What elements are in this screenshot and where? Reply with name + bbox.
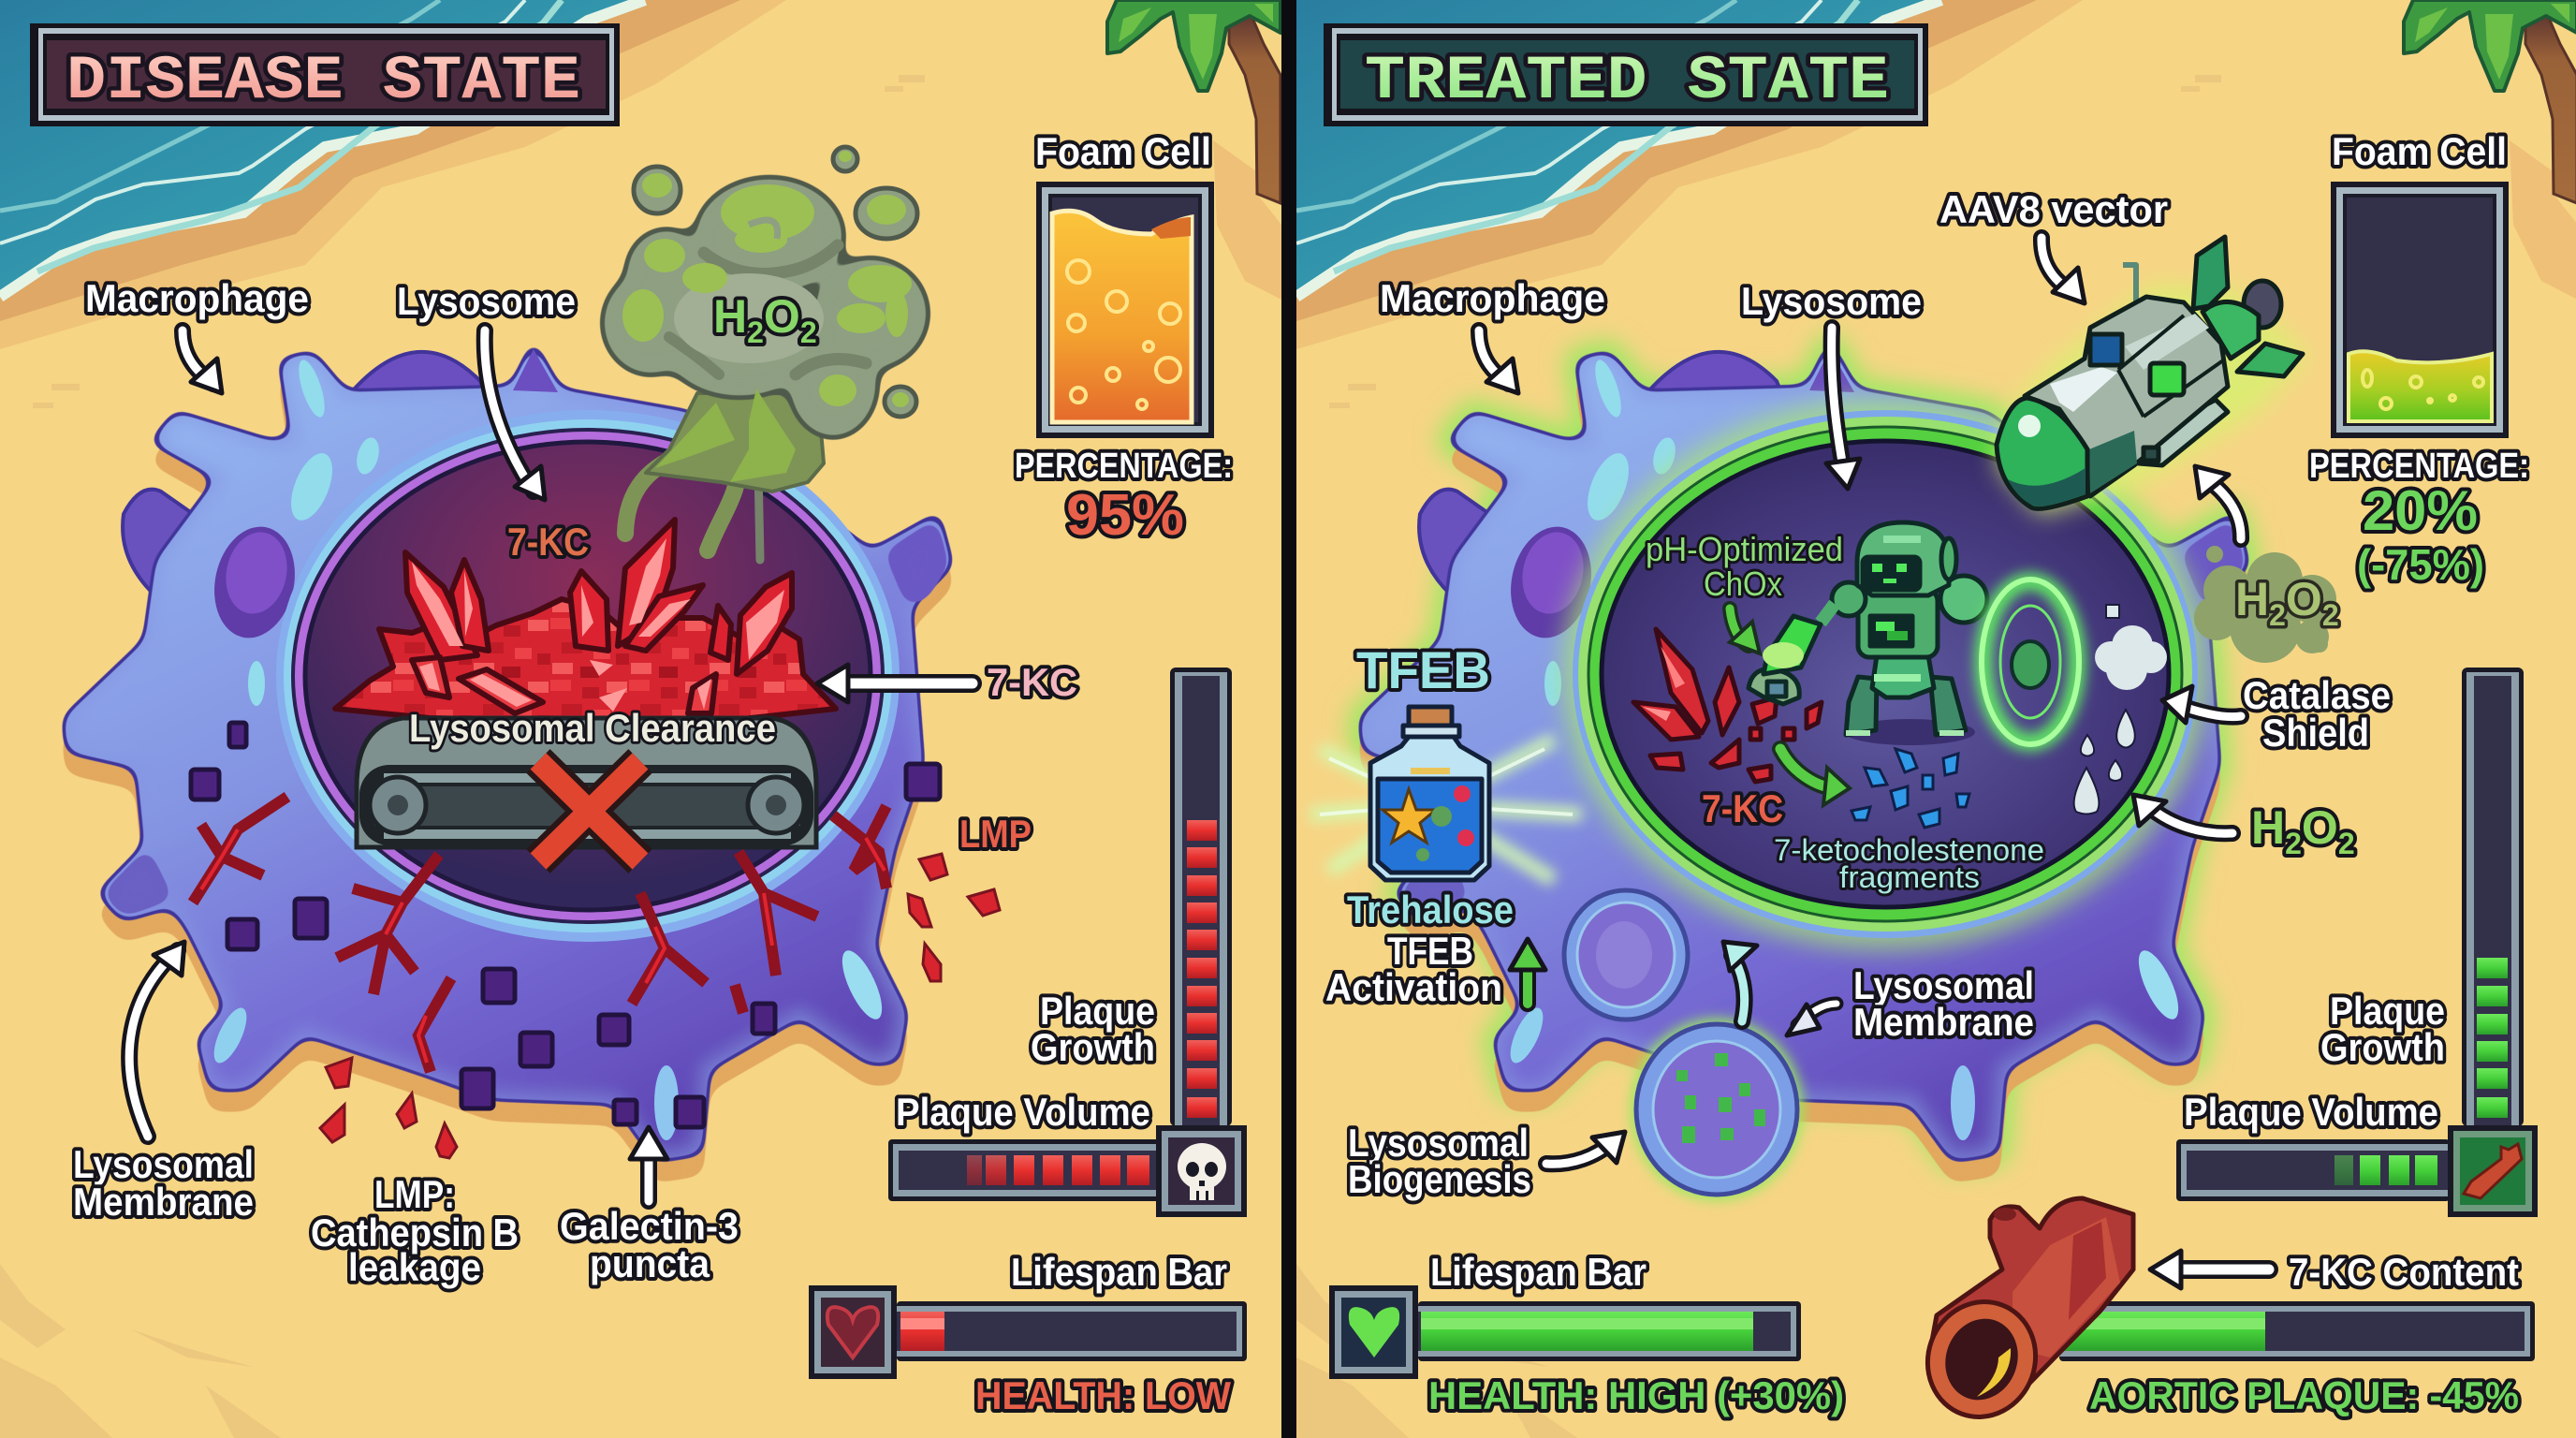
labels: treated: Growth [2320,1025,2445,1069]
icon: white H2O2 cloud and droplets [2074,605,2167,814]
label: H2O2 in cloud: H [713,290,747,343]
labels: disease: Growth [1031,1025,1155,1069]
labels: treated: 7-ketocholestenone [1774,833,2044,867]
foam percentage: 20%, -75%: (-75%) [2357,540,2484,589]
labels: disease: Plaque [1040,989,1155,1033]
foam percentage: 20%, -75%: 20% [2363,479,2478,542]
smoke cloud: H2O2 [600,147,930,560]
beach background [0,0,1281,1438]
label: H2O2 in cloud: 2 [800,315,817,349]
labels: treated: Lifespan Bar [1430,1250,1647,1294]
labels: treated: Plaque [2330,989,2445,1033]
lifespan bar, high [1418,1301,1801,1361]
labels: treated: AORTIC PLAQUE: -45% [2089,1373,2519,1417]
plaque volume bar, green [2176,1139,2450,1201]
cathepsin B droplets [320,854,1000,1158]
labels: treated: Lysosome [1741,279,1922,323]
labels: treated: 7-KC Content [2289,1250,2519,1294]
labels: treated: TFEB [1356,640,1490,699]
labels: treated: Plaque Volume [2184,1090,2438,1134]
label: H2O2 small cloud: H [2235,573,2269,625]
icon: artery box [2448,1125,2538,1217]
membrane cracks [193,797,886,1072]
foam percentage: 95%: PERCENTAGE: [1015,447,1233,486]
panel: treated state [1296,0,2576,1438]
heading: disease state: DISEASE STATE [66,46,580,116]
label: H2O2 small cloud: 2 [2269,598,2286,632]
foam percentage: 20%, -75%: PERCENTAGE: [2309,447,2529,486]
label: H2O2 small cloud: O [2286,573,2322,625]
labels: disease: leakage [348,1245,481,1289]
icon: catalase shield [1982,580,2079,744]
icon: heart, low [809,1285,897,1379]
panel: disease state [0,0,1281,1438]
labels: treated: Lysosomal [1348,1121,1529,1165]
conveyor: lysosomal clearance blocked [357,718,816,861]
icon: AAV8 vector submarine [1997,237,2307,515]
arrow: ChOx to enzyme [1730,609,1760,653]
labels: treated: AAV8 vector [1939,187,2168,231]
labels: disease [73,276,1231,1417]
vesicle: lysosomal biogenesis [1631,1019,1803,1200]
label: H2O2 small cloud: 2 [2322,598,2339,632]
labels: treated: Lysosomal [1853,963,2034,1007]
labels: disease: Lysosome [397,279,576,323]
labels: treated: 7-KC [1702,786,1783,830]
labels: treated [1325,187,2519,1417]
labels: treated: Catalase [2243,673,2391,717]
labels: treated: HEALTH: HIGH (+30%) [1428,1373,1844,1417]
labels: treated: O [2302,801,2338,854]
foam percentage: 95%: 95% [1066,483,1184,548]
plaque growth bar, green [2462,668,2524,1126]
labels: treated: Activation [1325,965,1502,1009]
galectin-3 puncta [191,723,940,1127]
labels: disease: Membrane [73,1180,254,1224]
labels: disease: puncta [590,1241,710,1285]
red X [538,761,640,861]
icon: blue fragments [1852,749,1969,828]
labels: treated: pH-Optimized [1646,530,1843,568]
icon: heart, high [1329,1285,1418,1379]
lysosome, green ring [1562,398,2208,950]
labels: disease: 7-KC [987,660,1077,704]
icon: aorta [1911,1198,2133,1432]
labels: treated: ChOx [1704,565,1782,603]
aortic plaque bar [2059,1301,2535,1361]
labels: treated: H [2251,801,2285,854]
icon: red crystals being cleared [1633,629,1822,782]
labels: treated: Membrane [1853,1000,2034,1044]
plaque growth bar, red [1170,668,1232,1126]
divider [1281,0,1296,1438]
labels: disease: Cathepsin B [311,1211,519,1255]
labels: disease: LMP [959,812,1032,856]
labels: treated: Macrophage [1380,276,1605,320]
labels: treated: TFEB [1387,929,1473,973]
labels: disease: Lysosomal Clearance [409,706,776,750]
heading: treated state [1324,23,1928,126]
foam percentage: 95% [1015,447,1233,548]
beach background, treated [1296,0,2576,1438]
foam cell gauge: Foam Cell [1035,129,1211,173]
lysosome [276,410,900,942]
labels: disease: Lysosomal [73,1142,254,1186]
heading: disease state [30,23,620,126]
arrows: treated [1479,238,2269,1288]
icon: TFEB bottle [1310,707,1582,880]
label: H2O2 in cloud: 2 [747,315,764,349]
foam percentage: 20%, -75% [2309,447,2529,589]
arrow: crystals to fragments [1780,749,1850,805]
vesicle: upper [1564,890,1688,1020]
foam cell gauge, treated [2331,129,2509,438]
macrophage cell, treated [1364,349,2245,1178]
labels: treated: 2 [2285,827,2302,860]
labels: disease: LMP: [374,1172,455,1216]
foam cell gauge [1035,129,1214,438]
labels: disease: Lifespan Bar [1011,1250,1227,1294]
labels: disease: Galectin-3 [560,1204,739,1248]
lifespan bar, low [897,1301,1247,1361]
label: H2O2 in cloud: O [764,290,800,343]
plaque volume bar, red [888,1139,1160,1201]
labels: disease: Macrophage [85,276,309,320]
labels: disease: Plaque Volume [896,1090,1150,1134]
labels: treated: 2 [2338,827,2355,860]
small H2O2 cloud [2194,546,2339,663]
7-KC crystal pile [335,520,836,721]
labels: disease: 7-KC [507,520,589,564]
labels: treated: Biogenesis [1348,1157,1531,1201]
labels: treated: Trehalose [1347,888,1514,932]
foam cell gauge, treated: Foam Cell [2332,129,2507,173]
labels: treated: Shield [2262,711,2369,755]
icon: green enzyme robot [1749,522,1987,745]
labels: disease: HEALTH: LOW [975,1373,1231,1417]
arrows: disease [129,330,973,1201]
labels: treated: fragments [1839,860,1980,894]
heading: treated state: TREATED STATE [1365,46,1889,116]
macrophage cell [67,349,948,1178]
icon: skull [1156,1125,1247,1217]
